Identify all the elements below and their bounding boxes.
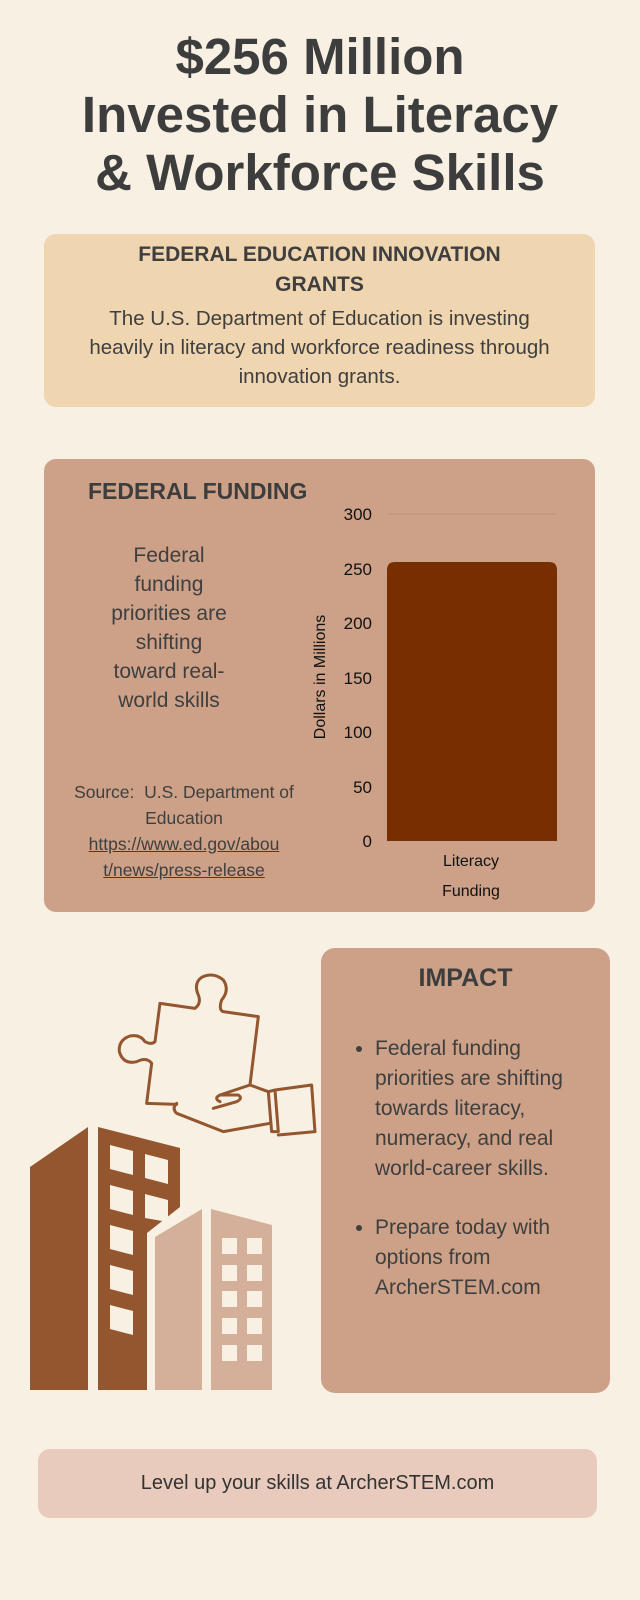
bar chart: 200 (344, 614, 372, 633)
footer banner: Level up your skills at ArcherSTEM.com (141, 1472, 494, 1494)
grants heading: GRANTS (275, 273, 364, 296)
impact bullets (356, 1037, 563, 1299)
bar chart: Literacy (443, 853, 499, 870)
bar chart: 50 (353, 778, 372, 797)
bar chart (312, 505, 557, 900)
bar chart: Dollars in Millions (312, 615, 329, 739)
funding heading: FEDERAL FUNDING (88, 478, 307, 504)
impact bullets: Federal funding priorities are shifting towards literacy, numeracy, and real world-career skills. (375, 1037, 563, 1180)
title: Invested in Literacy (82, 86, 558, 143)
grants heading (138, 243, 501, 296)
grants heading: FEDERAL EDUCATION INNOVATION (138, 243, 501, 266)
illustration: puzzle, hand and buildings (30, 974, 316, 1390)
bar chart: 100 (344, 723, 372, 742)
bar chart: 250 (344, 560, 372, 579)
impact heading: IMPACT (418, 964, 512, 992)
grants text: The U.S. Department of Education is investing heavily in literacy and workforce readiness through innovation grants. (89, 307, 550, 388)
panel: grants (44, 234, 595, 407)
source (74, 782, 294, 880)
title: & Workforce Skills (95, 144, 545, 201)
bar chart: 0 (363, 832, 372, 851)
source: https://www.ed.gov/abou (89, 834, 279, 854)
source: t/news/press-release (103, 860, 265, 880)
title: $256 Million (175, 28, 465, 85)
panel: federal funding (44, 459, 595, 912)
source: Source: U.S. Department of Education (74, 782, 294, 828)
funding text: Federal funding priorities are shifting toward real-world skills (111, 544, 227, 712)
impact bullets: Prepare today with options from ArcherSTEM.com (375, 1216, 550, 1299)
footer banner (38, 1449, 597, 1518)
bar chart: 300 (344, 505, 372, 524)
title (82, 28, 558, 201)
panel: impact (321, 948, 610, 1393)
bar chart: 150 (344, 669, 372, 688)
bar chart: Funding (442, 883, 500, 900)
